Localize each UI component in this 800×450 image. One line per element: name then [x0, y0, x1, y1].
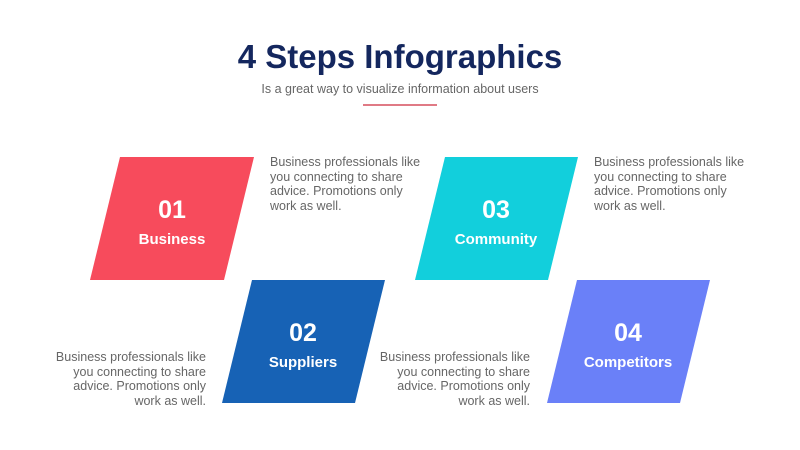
step 02: 02	[289, 319, 317, 347]
step 04: 04	[614, 319, 642, 347]
text: step 04: Business professionals like you connecting to share advice. Promotions only work as well.	[380, 350, 530, 408]
step 01: Business	[139, 231, 205, 248]
text: step 01: Business professionals like you connecting to share advice. Promotions only work as well.	[270, 155, 420, 212]
step 02: Suppliers	[269, 354, 337, 371]
step 02	[222, 280, 385, 403]
step 01	[90, 157, 254, 280]
title: 4 Steps Infographics	[238, 38, 562, 75]
divider accent	[363, 104, 437, 106]
step 03: Community	[455, 231, 538, 248]
step 03: 03	[482, 196, 510, 224]
text: step 02: Business professionals like you connecting to share advice. Promotions only work as well.	[56, 350, 206, 408]
step 03	[415, 157, 578, 280]
step 01: 01	[158, 196, 186, 224]
step 04	[547, 280, 710, 403]
step 04: Competitors	[584, 354, 672, 371]
text: step 03: Business professionals like you connecting to share advice. Promotions only work as well.	[594, 155, 744, 212]
subtitle: Is a great way to visualize information about users	[261, 82, 539, 96]
